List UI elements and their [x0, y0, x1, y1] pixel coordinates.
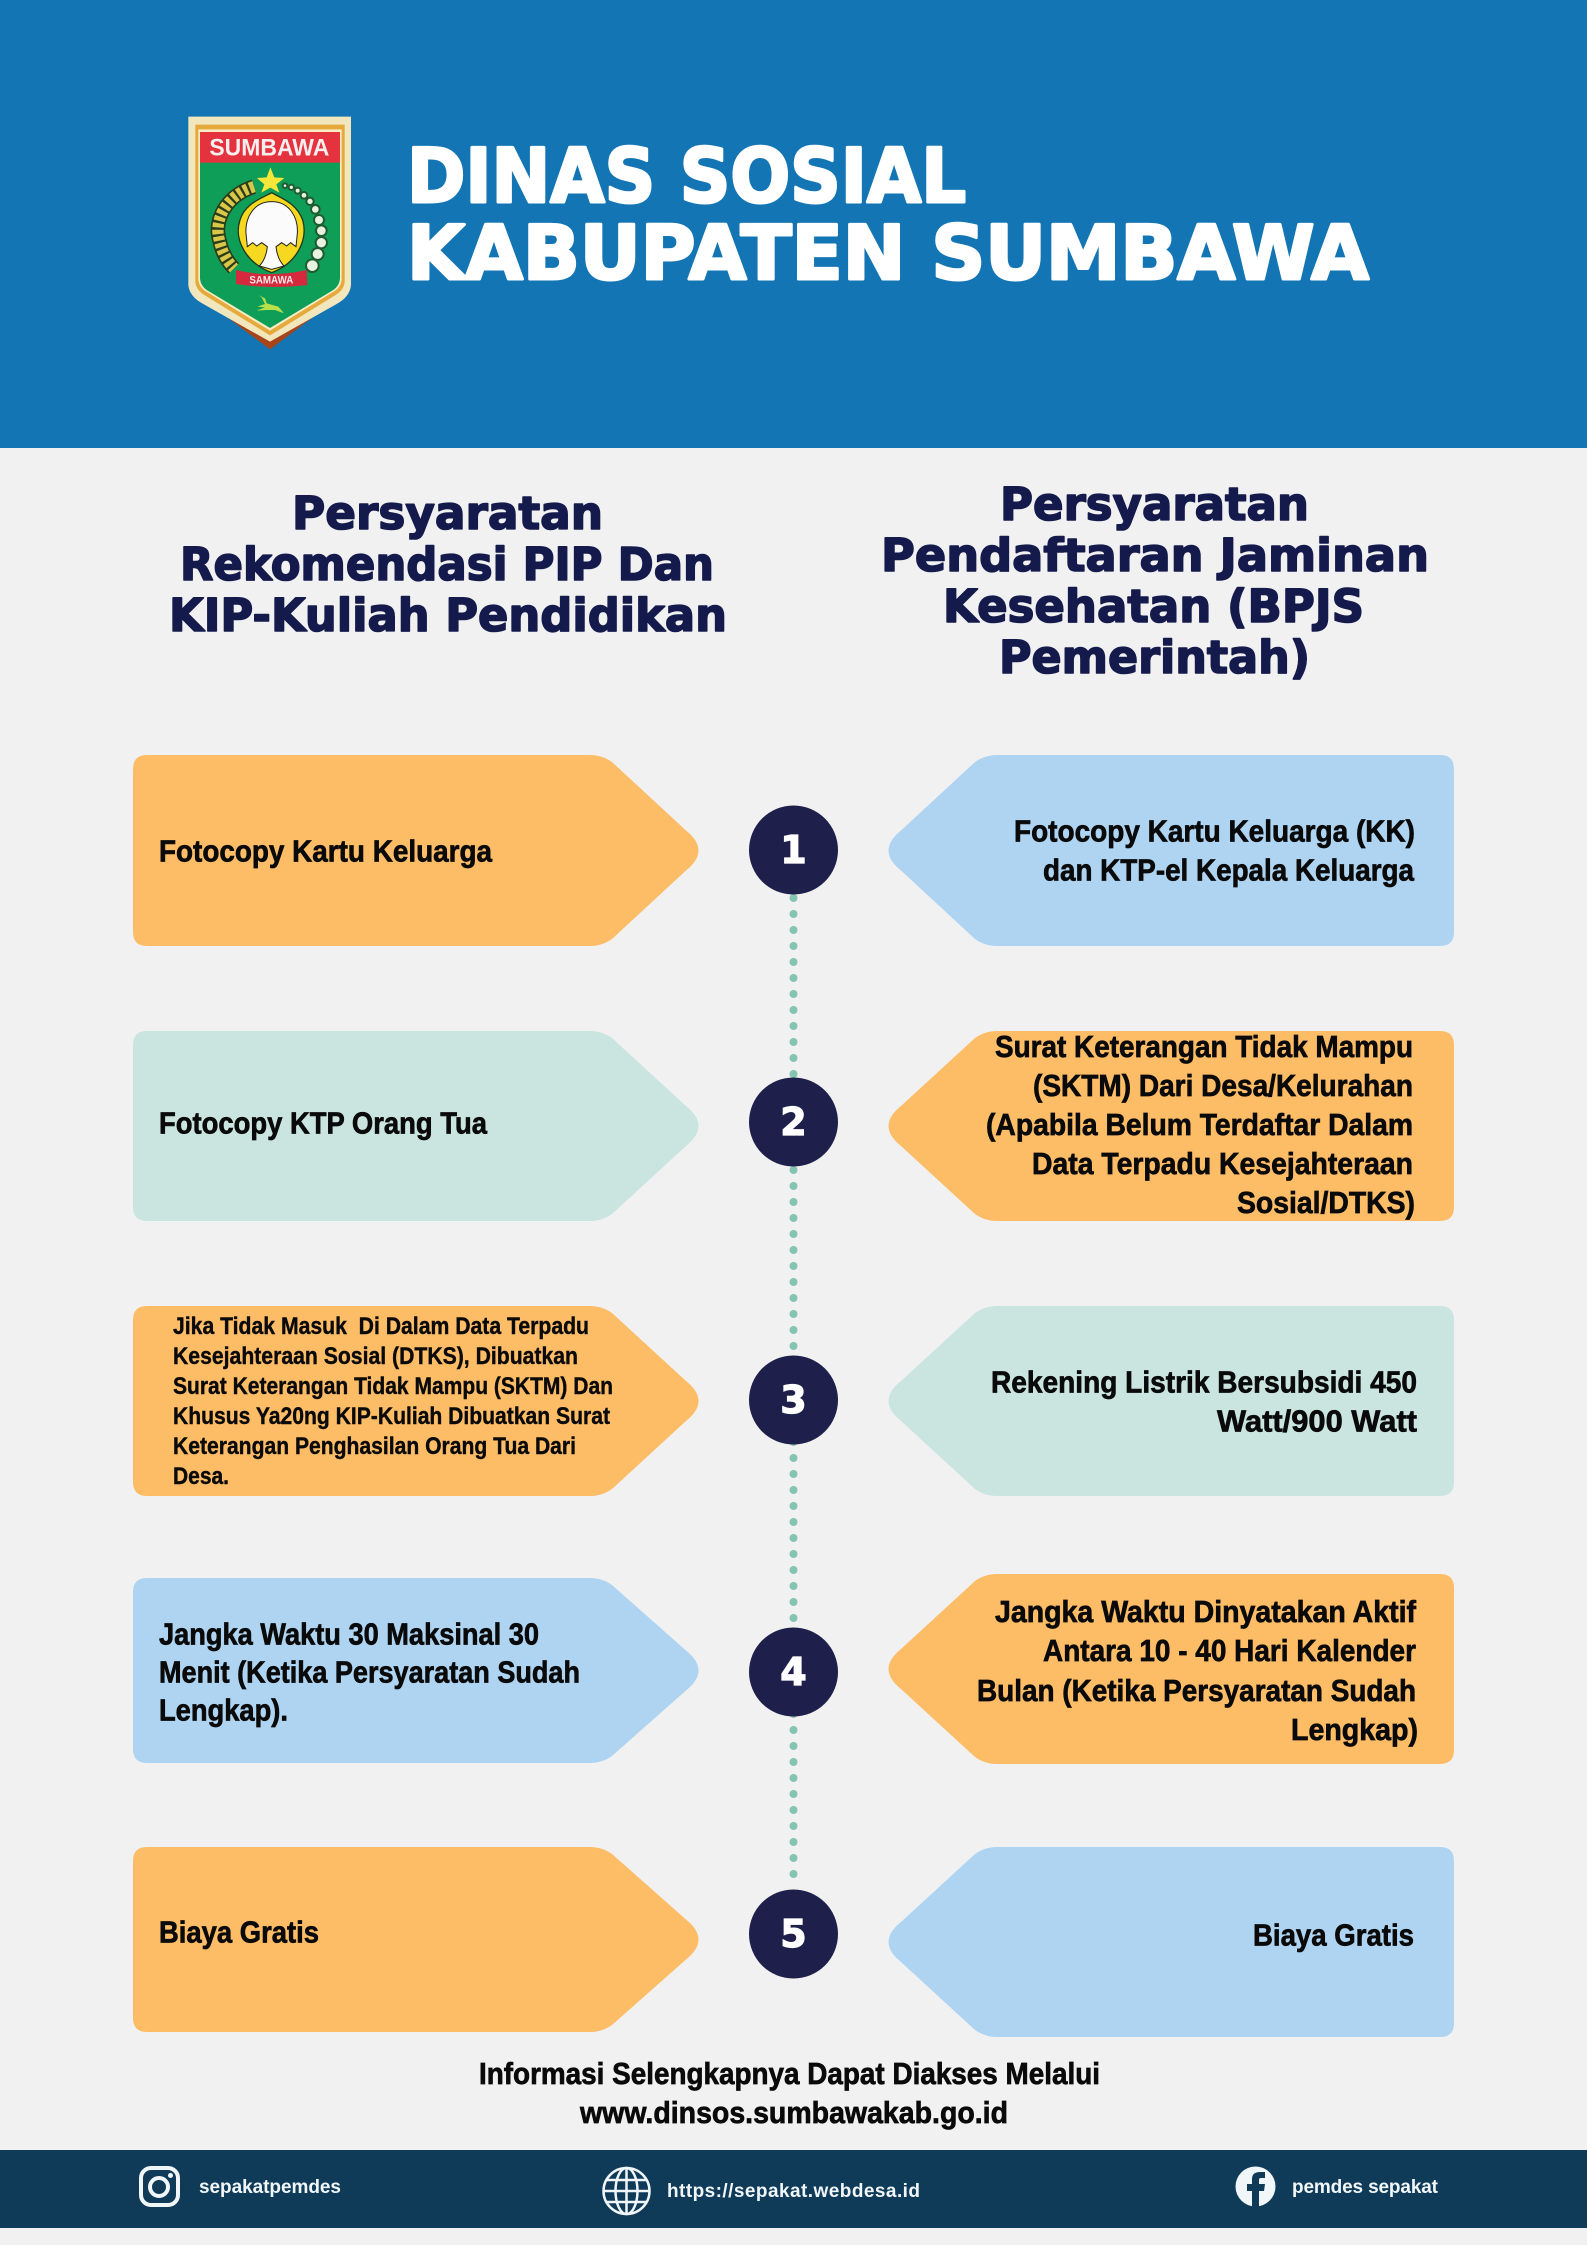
left card 3: Jika Tidak Masuk Di Dalam Data Terpadu	[173, 1313, 589, 1340]
step 1 number: 1	[780, 828, 807, 872]
left card 4	[133, 1578, 698, 1763]
icon: instagram	[141, 2168, 178, 2205]
step 1 number	[749, 806, 838, 894]
left card 3: Desa.	[173, 1463, 229, 1490]
heading: right column: Kesehatan (BPJS	[943, 580, 1364, 633]
heading: left column	[169, 487, 727, 642]
closing information text	[479, 2056, 1100, 2130]
right card 2: (Apabila Belum Terdaftar Dalam	[986, 1107, 1413, 1142]
title: DINAS SOSIAL	[407, 132, 966, 220]
closing information text: Informasi Selengkapnya Dapat Diakses Melalui	[479, 2056, 1100, 2091]
right card 1: dan KTP-el Kepala Keluarga	[1043, 852, 1415, 888]
logo: Sumbawa shield crest: SAMAWA	[249, 275, 293, 287]
step 2 number	[749, 1078, 838, 1166]
right card 3	[888, 1306, 1454, 1496]
right card 2: Sosial/DTKS)	[1237, 1185, 1415, 1220]
step 5 number: 5	[780, 1912, 807, 1956]
heading: right column: Pendaftaran Jaminan	[881, 529, 1429, 582]
right card 3: Watt/900 Watt	[1217, 1404, 1417, 1438]
logo: Sumbawa shield crest	[188, 117, 351, 349]
left card 4: Menit (Ketika Persyaratan Sudah	[159, 1654, 580, 1690]
left card 4: Lengkap).	[159, 1692, 288, 1728]
left card 5	[133, 1847, 698, 2032]
right card 4	[888, 1574, 1454, 1764]
header band	[0, 0, 1587, 448]
heading: left column: Persyaratan	[292, 487, 603, 540]
left card 3	[133, 1306, 698, 1496]
left card 2	[133, 1031, 698, 1221]
icon: facebook	[1236, 2166, 1276, 2207]
left card 3: Kesejahteraan Sosial (DTKS), Dibuatkan	[173, 1343, 578, 1370]
right card 1	[888, 755, 1454, 946]
left card 1: Fotocopy Kartu Keluarga	[159, 834, 493, 868]
step 3 number	[749, 1356, 838, 1444]
step 3 number: 3	[780, 1378, 807, 1422]
footer band	[0, 2150, 1587, 2228]
left card 5: Biaya Gratis	[159, 1914, 319, 1950]
step 4 number: 4	[780, 1650, 807, 1694]
right card 4: Lengkap)	[1291, 1712, 1418, 1747]
right card 3: Rekening Listrik Bersubsidi 450	[991, 1364, 1417, 1400]
step 4 number	[749, 1628, 838, 1716]
right card 2: Data Terpadu Kesejahteraan	[1032, 1146, 1413, 1181]
step 2 number: 2	[780, 1100, 807, 1144]
left card 1	[133, 755, 698, 946]
heading: left column: Rekomendasi PIP Dan	[180, 538, 714, 591]
right card 2	[888, 1029, 1454, 1221]
left card 3: Khusus Ya20ng KIP-Kuliah Dibuatkan Surat	[173, 1403, 610, 1430]
closing information text: www.dinsos.sumbawakab.go.id	[579, 2095, 1008, 2130]
step 5 number	[749, 1890, 838, 1978]
website address: https://sepakat.webdesa.id	[667, 2181, 920, 2202]
left card 3: Surat Keterangan Tidak Mampu (SKTM) Dan	[173, 1373, 613, 1400]
dotted timeline connector	[790, 898, 798, 1890]
right card 2: Surat Keterangan Tidak Mampu	[995, 1029, 1413, 1064]
right card 4: Antara 10 - 40 Hari Kalender	[1043, 1633, 1416, 1668]
left card 2: Fotocopy KTP Orang Tua	[159, 1106, 488, 1140]
right card 5: Biaya Gratis	[1253, 1918, 1414, 1952]
right card 4: Bulan (Ketika Persyaratan Sudah	[977, 1673, 1416, 1708]
facebook page name: pemdes sepakat	[1292, 2177, 1439, 2198]
icon: globe	[604, 2168, 650, 2214]
right card 1: Fotocopy Kartu Keluarga (KK)	[1014, 814, 1415, 848]
heading: right column	[881, 478, 1429, 684]
logo: Sumbawa shield crest: SUMBAWA	[209, 135, 329, 162]
left card 4: Jangka Waktu 30 Maksinal 30	[159, 1616, 539, 1652]
instagram handle: sepakatpemdes	[199, 2177, 341, 2198]
heading: right column: Pemerintah)	[999, 631, 1310, 684]
right card 4: Jangka Waktu Dinyatakan Aktif	[995, 1594, 1417, 1629]
right card 5	[888, 1847, 1454, 2037]
heading: right column: Persyaratan	[1000, 478, 1309, 531]
title: KABUPATEN SUMBAWA	[407, 209, 1369, 297]
left card 3: Keterangan Penghasilan Orang Tua Dari	[173, 1433, 576, 1460]
title	[407, 132, 1369, 297]
right card 2: (SKTM) Dari Desa/Kelurahan	[1033, 1068, 1413, 1103]
heading: left column: KIP-Kuliah Pendidikan	[169, 589, 727, 642]
